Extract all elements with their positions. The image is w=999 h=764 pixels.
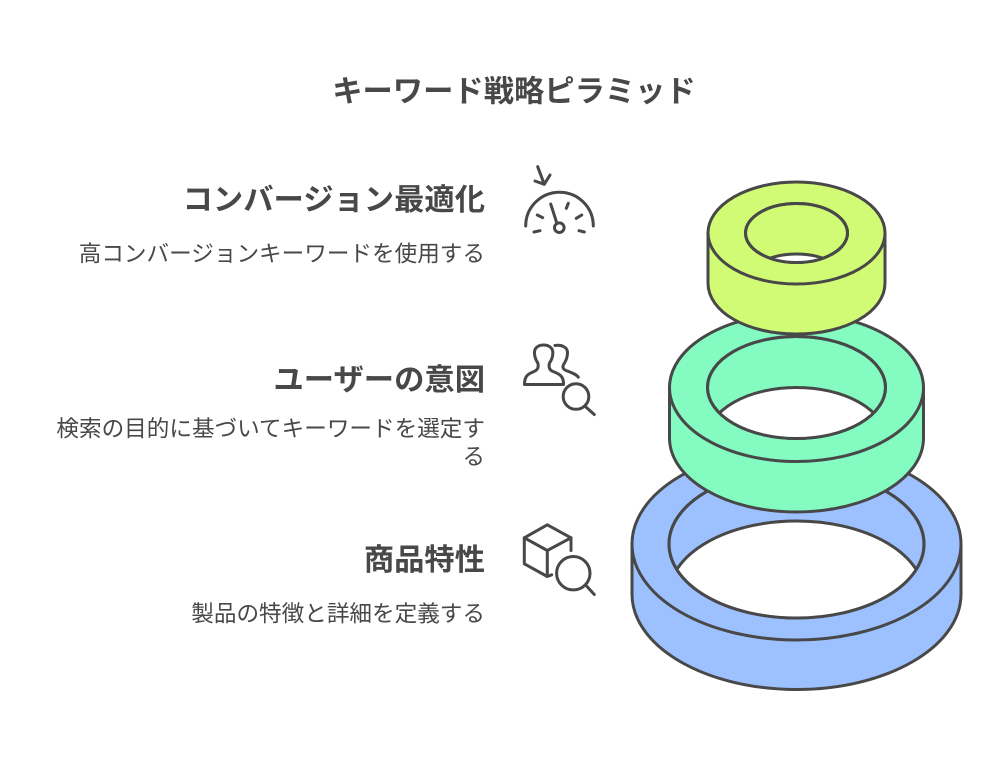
ring: conversion optimization (top, yellow) [708,182,885,334]
text: conversion optimization description: 高コンバージョンキーワードを使用する [79,242,485,266]
text: user intent description line 2: る [462,444,485,470]
heading: conversion optimization: コンバージョン最適化 [183,183,485,217]
text: product attributes description: 製品の特徴と詳細を定義する [191,602,485,626]
ring: user intent (middle, green) [670,314,924,512]
icon: gauge with arrow [526,167,593,232]
heading: product attributes: 商品特性 [364,543,485,577]
text: user intent description: 検索の目的に基づいてキーワードを選定す [56,416,485,442]
title: キーワード戦略ピラミッド [332,74,696,108]
icon: box with magnifier [524,525,594,594]
heading: user intent: ユーザーの意図 [274,363,485,397]
icon: users with magnifier [524,345,594,414]
ring: product attributes (bottom, blue) [632,448,961,690]
